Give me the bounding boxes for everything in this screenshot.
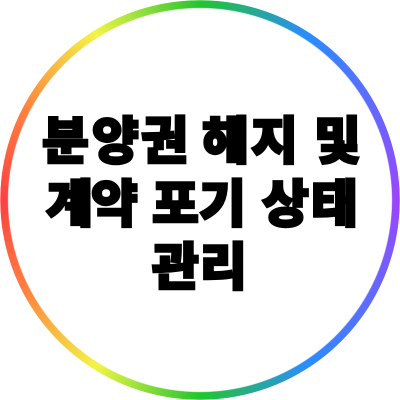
title line 3: 관리 bbox=[152, 239, 247, 296]
title line 1: 분양권 해지 및 bbox=[0, 113, 361, 170]
title line 2: 계약 포기 상태 bbox=[0, 176, 358, 233]
